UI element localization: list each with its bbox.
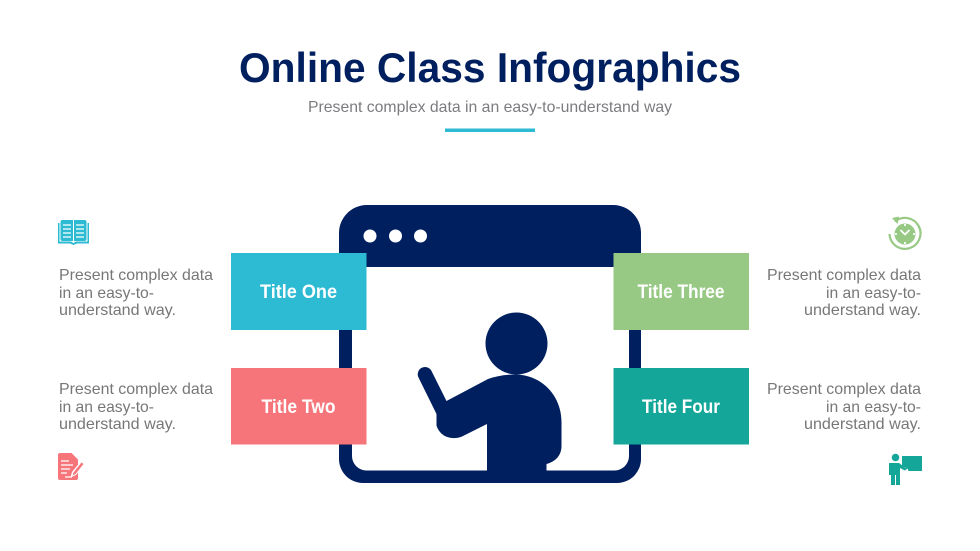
text block: top right [767, 267, 921, 319]
icon: clock with circular arrow [890, 216, 920, 249]
text block: bottom left: understand way. [59, 416, 176, 433]
text block: bottom right: in an easy-to- [826, 399, 921, 416]
icon: teacher at board [889, 454, 922, 485]
card: Title Two: Title Two [262, 397, 336, 418]
text block: top left: in an easy-to- [59, 285, 154, 302]
card: Title Three: Title Three [638, 282, 724, 303]
browser window illustration [339, 205, 641, 483]
text block: top left: understand way. [59, 302, 176, 319]
text block: bottom left: Present complex data [59, 381, 213, 398]
text block: bottom right: understand way. [804, 416, 921, 433]
text block: top right: understand way. [804, 302, 921, 319]
text block: bottom left: in an easy-to- [59, 399, 154, 416]
title underline [445, 128, 535, 132]
text block: top right: Present complex data [767, 267, 921, 284]
title: Online Class Infographics [239, 44, 741, 91]
subtitle: Present complex data in an easy-to-understand way [308, 99, 672, 116]
card: Title One [231, 253, 366, 330]
card: Title Four [614, 368, 749, 444]
text block: top left: Present complex data [59, 267, 213, 284]
window dots [364, 230, 427, 242]
text block: bottom right [767, 381, 921, 433]
card: Title Two [231, 368, 366, 444]
card: Title One: Title One [260, 282, 337, 303]
teacher figure [418, 312, 562, 472]
text block: bottom left [59, 381, 213, 433]
icon: open book [58, 220, 89, 245]
icon: document and pencil [58, 453, 85, 480]
text block: top left [59, 267, 213, 319]
text block: bottom right: Present complex data [767, 381, 921, 398]
card: Title Four: Title Four [642, 397, 721, 418]
card: Title Three [614, 253, 749, 330]
text block: top right: in an easy-to- [826, 285, 921, 302]
